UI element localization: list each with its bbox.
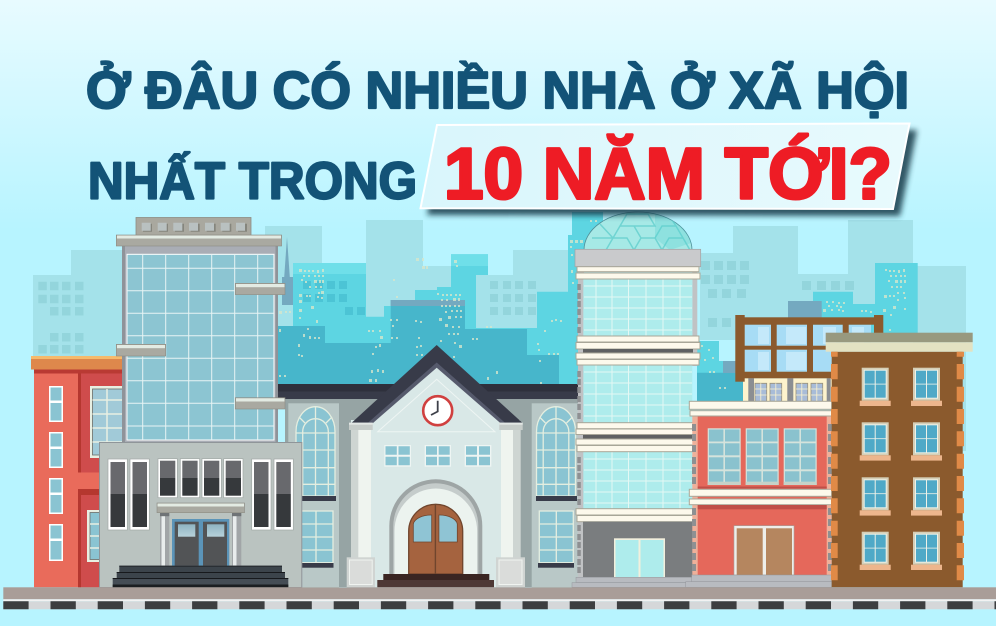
windows row 1 xyxy=(860,368,942,406)
dome xyxy=(584,212,700,250)
wing: left xyxy=(288,403,339,587)
upper window center xyxy=(746,428,779,485)
windows row 3 xyxy=(860,477,942,516)
rooftop cream floor xyxy=(743,378,832,401)
windows: left column xyxy=(49,386,63,561)
glass curtain wall xyxy=(127,254,274,440)
base steps xyxy=(576,577,696,583)
skyline: pale far buildings xyxy=(33,220,966,451)
shop steps xyxy=(692,575,832,582)
entrance steps xyxy=(113,566,288,587)
door steps xyxy=(383,574,489,580)
skyline: lit window dots xyxy=(279,220,906,389)
windows row 4 xyxy=(860,532,942,570)
window: right arched xyxy=(536,406,576,496)
clock xyxy=(423,396,452,425)
rooftop box with vents xyxy=(136,218,251,236)
building: rooftop glass frame xyxy=(735,315,883,401)
entrance canopy xyxy=(157,503,244,513)
highlight banner xyxy=(420,124,917,216)
upper windows xyxy=(384,445,491,467)
column right xyxy=(496,423,525,587)
arched entrance xyxy=(389,479,482,587)
building: school wings and roof band xyxy=(278,384,580,587)
sills and lower windows xyxy=(296,496,577,568)
window: upper wide xyxy=(90,386,124,458)
building: dome glass tower xyxy=(572,212,701,587)
roof xyxy=(826,333,973,342)
short windows xyxy=(158,459,243,498)
frame bars xyxy=(735,315,883,382)
corner bricks xyxy=(831,352,964,580)
windows row 2 xyxy=(860,422,942,461)
title line 2: NHẤT TRONG xyxy=(88,152,417,210)
glass door xyxy=(614,538,665,577)
glass floors xyxy=(583,279,692,509)
top block xyxy=(575,249,701,267)
window: left arched xyxy=(296,406,335,496)
skyline: teal mid buildings xyxy=(278,212,918,401)
building: brown apartment xyxy=(826,333,973,587)
wooden door xyxy=(409,504,463,574)
building: grey lobby block xyxy=(100,442,302,588)
roof cap xyxy=(116,235,282,246)
road xyxy=(3,587,996,609)
building: red shop xyxy=(686,401,832,587)
entrance doors xyxy=(172,519,229,566)
banner text: 10 NĂM TỚI? xyxy=(444,134,892,214)
side strip and bricks xyxy=(577,266,697,577)
wing: right xyxy=(532,403,579,587)
gable roof xyxy=(352,345,522,423)
floor ledges xyxy=(576,267,700,522)
upper windows xyxy=(708,428,741,485)
side bricks xyxy=(692,424,832,571)
building: grey glass tower xyxy=(116,218,285,446)
building: school central hall xyxy=(347,345,525,587)
double door xyxy=(734,526,794,575)
middle ledges xyxy=(689,489,832,505)
entrance columns xyxy=(160,513,241,566)
tall windows xyxy=(108,459,293,530)
window: lower wide xyxy=(87,510,124,562)
upper ledges xyxy=(689,401,832,416)
ledges xyxy=(116,283,285,409)
skyline: dark near buildings xyxy=(278,237,822,401)
title line 1: Ở ĐÂU CÓ NHIỀU NHÀ Ở XÃ HỘI xyxy=(86,61,909,120)
column left xyxy=(347,423,375,587)
roof: orange cornice xyxy=(31,356,124,370)
ground floor xyxy=(583,522,698,577)
upper window right xyxy=(784,428,817,485)
frame glass xyxy=(744,325,871,372)
building: red apartment left xyxy=(31,356,124,587)
